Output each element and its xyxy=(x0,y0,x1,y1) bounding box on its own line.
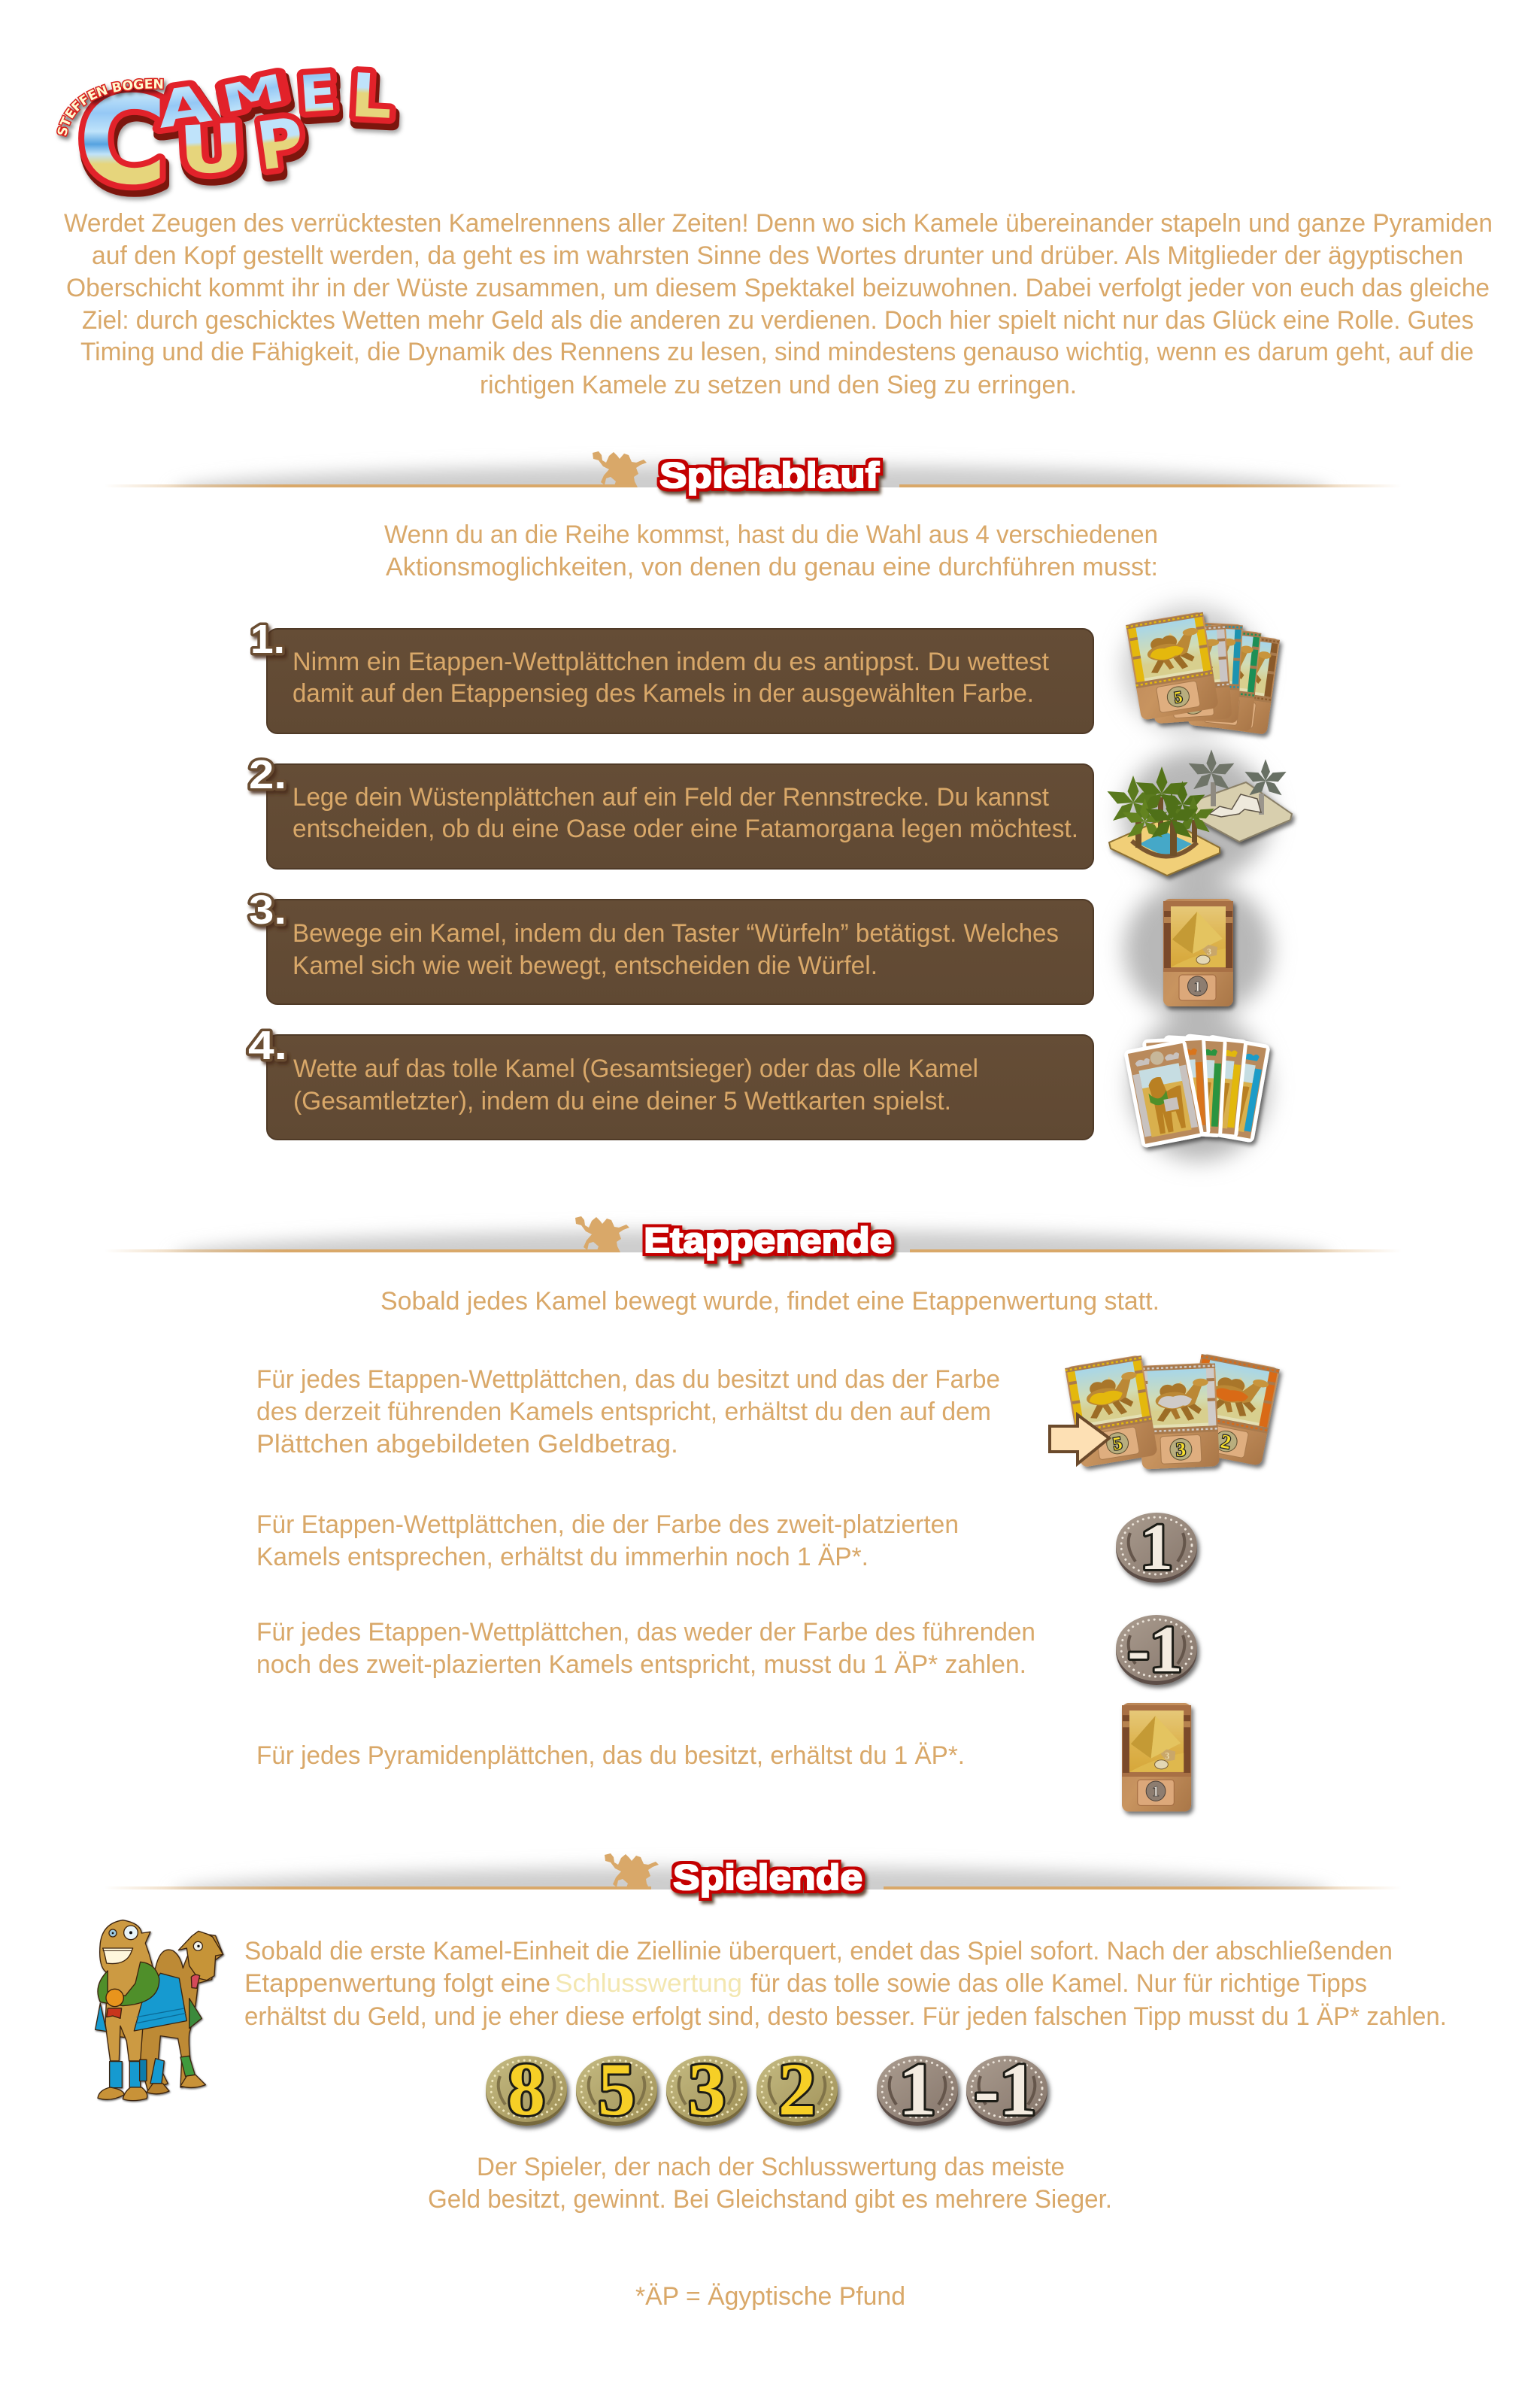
text: second place rule: Kamels entsprechen, erhältst du immerhin noch 1 ÄP*. xyxy=(256,1543,869,1571)
coin 8: 8 xyxy=(508,2047,545,2131)
action 4 text: Wette auf das tolle Kamel (Gesamtsieger) oder das olle Kamel xyxy=(293,1055,978,1083)
intro text: Timing und die Fähigkeit, die Dynamik des Rennens zu lesen, sind mindestens genauso wichtig, wenn es darum geht, auf die xyxy=(80,338,1474,366)
grey glow behind action illustrations xyxy=(1123,606,1272,1161)
intro text: Werdet Zeugen des verrücktesten Kamelrennens aller Zeiten! Denn wo sich Kamele übereinander stapeln und ganze Pyramiden xyxy=(64,209,1493,238)
logo: Camel Up: E xyxy=(298,64,338,124)
intro text: auf den Kopf gestellt werden, da geht es im wahrsten Sinne des Wortes drunter und drüber. Als Mitglieder der ägyptischen xyxy=(92,241,1463,270)
coin 5 xyxy=(576,2047,657,2131)
intro: choice of actions: Aktionsmoglichkeiten, von denen du genau eine durchführen musst: xyxy=(386,553,1158,581)
text: second place rule: Für Etappen-Wettplättchen, die der Farbe des zweit-platzierten xyxy=(256,1510,959,1539)
coin 3: 3 xyxy=(688,2047,726,2131)
panel: action 1 xyxy=(250,617,1093,733)
icon: three betting tiles with arrow xyxy=(1050,1353,1280,1470)
heading: Etappenende: Etappenende xyxy=(644,1220,892,1260)
coin 5: 5 xyxy=(598,2047,635,2131)
intro text: richtigen Kamele zu setzen und den Sieg zu erringen. xyxy=(480,371,1077,399)
logo: Camel Up: M xyxy=(217,66,289,122)
intro: stage scoring: Sobald jedes Kamel bewegt wurde, findet eine Etappenwertung statt. xyxy=(380,1287,1160,1316)
text: end of game: Schlusswertung xyxy=(555,1969,742,1998)
icon: coin minus 1: -1 xyxy=(1127,1613,1183,1686)
footnote: *ÄP = Ägyptische Pfund xyxy=(635,2282,905,2311)
text: second place rule xyxy=(256,1510,959,1571)
text: pyramid rule: Für jedes Pyramidenplättchen, das du besitzt, erhältst du 1 ÄP*. xyxy=(256,1741,965,1770)
number 1: 1. xyxy=(250,617,285,662)
illustration: winner and loser camels xyxy=(95,1920,223,2101)
logo: Camel Up: L xyxy=(349,60,394,132)
number 3: 3. xyxy=(249,888,286,933)
icon: pyramid tile xyxy=(1122,1703,1191,1811)
logo: Camel Up: C xyxy=(78,71,168,212)
intro text: Ziel: durch geschicktes Wetten mehr Geld als die anderen zu verdienen. Doch hier spielt nicht nur das Glück eine Rolle. Gutes xyxy=(82,306,1474,335)
intro: choice of actions: Wenn du an die Reihe kommst, hast du die Wahl aus 4 verschiedenen xyxy=(384,521,1158,549)
icon: betting tile stack: 5 xyxy=(1173,687,1184,706)
text: penalty rule: Für jedes Etappen-Wettplättchen, das weder der Farbe des führenden xyxy=(256,1618,1035,1647)
text: end of game: erhältst du Geld, und je eher diese erfolgt sind, desto besser. Für jeden falschen Tipp musst du 1 ÄP* zahlen. xyxy=(244,2002,1447,2031)
logo: Camel Up: P xyxy=(253,103,309,186)
icon: camel silhouette xyxy=(575,1216,629,1252)
text: penalty rule: noch des zweit-plazierten Kamels entspricht, musst du 1 ÄP* zahlen. xyxy=(256,1650,1026,1679)
icon: oasis and mirage tiles xyxy=(1107,749,1292,876)
arrow xyxy=(1050,1415,1109,1464)
coin 2: 2 xyxy=(778,2047,816,2131)
logo: Camel Up: C xyxy=(78,71,168,212)
heading: Spielablauf: Spielablauf xyxy=(659,455,879,495)
logo: Camel Up: M xyxy=(217,66,289,122)
text: leading camel rule xyxy=(256,1365,1000,1458)
icon: three betting tiles with arrow: 5 xyxy=(1111,1434,1123,1455)
action 1 text xyxy=(293,648,1050,708)
logo: Camel Up: U xyxy=(177,109,246,190)
action 1 text: Nimm ein Etappen-Wettplättchen indem du es antippst. Du wettest xyxy=(293,648,1050,676)
coin 1 xyxy=(877,2047,958,2131)
action 2 text: Lege dein Wüstenplättchen auf ein Feld der Rennstrecke. Du kannst xyxy=(293,783,1050,812)
panel: action 4 xyxy=(248,1023,1093,1140)
icon: coin 1 xyxy=(1116,1511,1197,1584)
text: leading camel rule: des derzeit führenden Kamels entspricht, erhältst du den auf dem xyxy=(256,1398,991,1426)
logo: Camel Up: P xyxy=(253,103,309,186)
logo: Camel Up: U xyxy=(177,109,246,190)
icon: three betting tiles with arrow: 2 xyxy=(1219,1430,1232,1453)
icon: betting tile stack xyxy=(1126,612,1280,735)
logo: Camel Up: E xyxy=(298,64,338,124)
icon: fan of betting cards xyxy=(1123,1034,1271,1149)
logo: Camel Up: STEFFEN BOGEN xyxy=(56,78,169,143)
icon: coin minus 1 xyxy=(1116,1613,1197,1686)
number 4: 4. xyxy=(248,1023,287,1068)
icon: three betting tiles with arrow: 3 xyxy=(1175,1438,1187,1461)
icon: coin 1: 1 xyxy=(1140,1511,1173,1584)
action 1 text: damit auf den Etappensieg des Kamels in der ausgewählten Farbe. xyxy=(293,679,1034,708)
action 3 text xyxy=(293,919,1059,980)
icon: camel silhouette xyxy=(605,1853,659,1889)
text: end of game: Sobald die erste Kamel-Einheit die Ziellinie überquert, endet das Spiel sofort. Nach der abschließenden xyxy=(244,1937,1393,1965)
action 2 text xyxy=(293,783,1078,843)
logo: Camel Up: A xyxy=(153,74,215,141)
panel: action 2 xyxy=(249,752,1093,869)
coin 8 xyxy=(486,2047,567,2131)
action 4 text xyxy=(293,1055,978,1115)
coin row: final scoring values xyxy=(486,2047,1047,2131)
text: end of game xyxy=(244,1937,1447,2031)
text: penalty rule xyxy=(256,1618,1035,1679)
section divider: Etappenende xyxy=(114,1222,1391,1252)
intro text xyxy=(64,209,1493,399)
text: winner: Geld besitzt, gewinnt. Bei Gleichstand gibt es mehrere Sieger. xyxy=(428,2185,1112,2214)
coin minus 1: -1 xyxy=(974,2047,1037,2131)
text: end of game: Etappenwertung folgt eine xyxy=(244,1969,550,1998)
panel: action 3 xyxy=(249,888,1093,1004)
text: winner xyxy=(428,2153,1112,2214)
number 2: 2. xyxy=(249,752,286,797)
icon: camel silhouette xyxy=(593,451,647,487)
logo: Camel Up xyxy=(56,60,404,212)
logo: Camel Up: A xyxy=(153,74,215,141)
icon: pyramid tile xyxy=(1163,899,1233,1006)
action 4 text: (Gesamtletzter), indem du eine deiner 5 Wettkarten spielst. xyxy=(293,1087,951,1115)
action 2 text: entscheiden, ob du eine Oase oder eine Fatamorgana legen möchtest. xyxy=(293,815,1078,843)
coin 2 xyxy=(756,2047,838,2131)
heading: Spielende: Spielende xyxy=(673,1857,862,1897)
intro text: Oberschicht kommt ihr in der Wüste zusammen, um diesem Spektakel beizuwohnen. Dabei verfolgt jeder von euch das gleiche xyxy=(66,274,1490,302)
text: winner: Der Spieler, der nach der Schlusswertung das meiste xyxy=(477,2153,1065,2181)
intro: choice of actions xyxy=(384,521,1158,581)
action 3 text: Bewege ein Kamel, indem du den Taster “Würfeln” betätigst. Welches xyxy=(293,919,1059,948)
text: leading camel rule: Für jedes Etappen-Wettplättchen, das du besitzt und das der Farbe xyxy=(256,1365,1000,1394)
text: leading camel rule: Plättchen abgebildeten Geldbetrag. xyxy=(256,1430,678,1458)
coin 3 xyxy=(666,2047,747,2131)
section divider: Spielende xyxy=(114,1859,1391,1889)
action 3 text: Kamel sich wie weit bewegt, entscheiden die Würfel. xyxy=(293,952,878,980)
coin 1: 1 xyxy=(899,2047,936,2131)
text: end of game: für das tolle sowie das olle Kamel. Nur für richtige Tipps xyxy=(750,1969,1367,1998)
logo: Camel Up: L xyxy=(349,60,394,132)
section divider: Spielablauf xyxy=(114,457,1391,487)
